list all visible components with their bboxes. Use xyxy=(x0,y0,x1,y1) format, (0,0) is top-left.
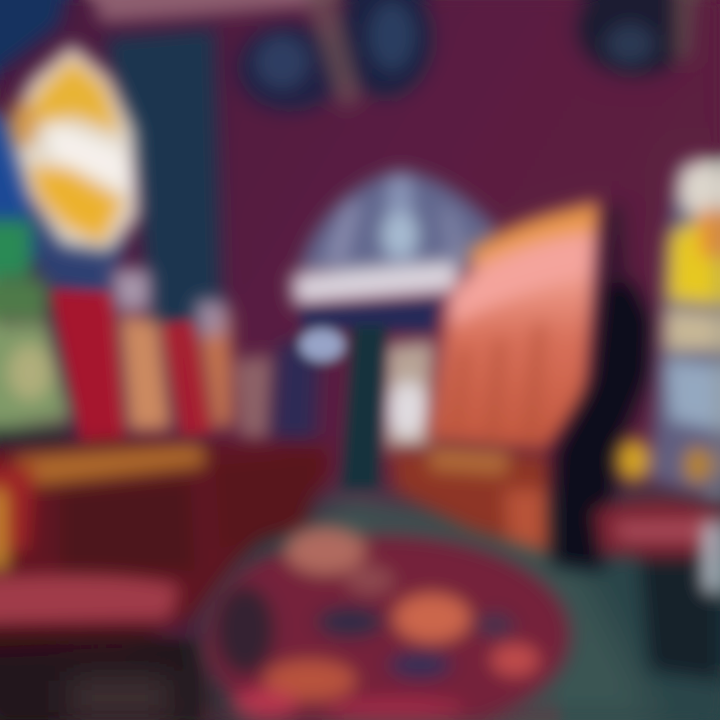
patterned carpet xyxy=(205,526,570,720)
back slot machines xyxy=(272,335,435,450)
chair seat xyxy=(0,574,180,665)
star sign xyxy=(8,45,138,252)
dark column xyxy=(552,205,652,570)
dark blue column xyxy=(105,28,222,330)
floor shading xyxy=(200,490,720,720)
right slot machine xyxy=(617,160,720,500)
left green sign and screen xyxy=(0,220,72,447)
lamp dome xyxy=(292,172,498,305)
ceiling lamps xyxy=(236,0,698,112)
left blue wall corner xyxy=(0,0,125,300)
red columns xyxy=(52,290,212,442)
counter and left chairs xyxy=(0,440,330,650)
orange slot panels xyxy=(112,270,275,440)
orange slot machine xyxy=(428,202,600,450)
lamp canopy and pole xyxy=(300,300,440,490)
floor xyxy=(0,160,720,720)
bottom left shadow xyxy=(0,640,220,720)
machine base xyxy=(390,445,555,555)
right red chair xyxy=(592,499,720,680)
top ceiling strip xyxy=(80,0,330,22)
